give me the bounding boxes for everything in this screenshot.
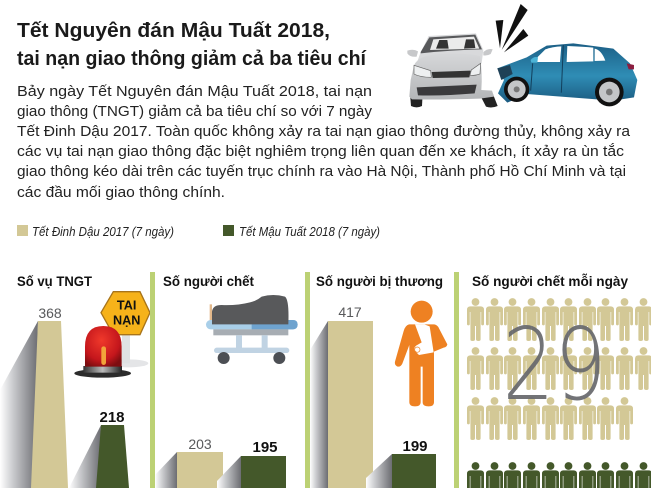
- heading: Số người chết: [163, 273, 254, 289]
- pictogram: 2018 people: [467, 462, 651, 488]
- title: Tết Nguyên đán Mậu Tuất 2018,: [17, 20, 330, 42]
- intro text block: Tết Đinh Dậu 2017. Toàn quốc không xảy ra tai nạn giao thông đường thủy, không xảy ra: [17, 123, 631, 140]
- heading: Số vụ TNGT: [17, 273, 92, 289]
- large number 29: 29: [502, 306, 606, 423]
- heading: Số người chết mỗi ngày: [472, 273, 628, 289]
- intro text block: giao thông (TNGT) giảm cả ba tiêu chí so với 7 ngày: [17, 103, 373, 120]
- icon: injured person: [395, 301, 447, 406]
- panel: so nguoi chet moi ngay: [467, 273, 651, 488]
- intro text block: các vụ tai nạn giao thông đặc biệt nghiêm trọng liên quan đến xe khách, ít xảy ra ùn tắc: [17, 143, 625, 160]
- heading: Số người bị thương: [316, 273, 443, 289]
- panel: so nguoi chet: [155, 273, 298, 488]
- icon: accident sign and siren: TAI: [117, 298, 136, 312]
- divider: [454, 272, 459, 488]
- illustration: car crash: [407, 4, 637, 108]
- icon: impact spikes: [496, 4, 528, 52]
- icon: grey car front: [407, 33, 498, 108]
- intro text block: giao thông kéo dài trên các tuyến trục chính ra vào Hà Nội, Thành phố Hồ Chí Minh và tại: [17, 163, 626, 180]
- bar 2018: 218: [69, 409, 129, 488]
- bar 2017: 417: [310, 304, 373, 488]
- bar 2018: 199: [366, 438, 436, 488]
- title: [17, 20, 367, 70]
- divider: [150, 272, 155, 488]
- intro text block: Bảy ngày Tết Nguyên đán Mậu Tuất 2018, tai nạn: [17, 83, 372, 100]
- bar 2017: 368: [0, 305, 68, 488]
- title: tai nạn giao thông giảm cả ba tiêu chí: [17, 48, 367, 70]
- intro text block: các đầu mối giao thông chính.: [17, 184, 225, 201]
- bar 2017: 203: 203: [188, 436, 212, 452]
- icon: blue car side: [497, 43, 637, 106]
- intro text block: [17, 83, 631, 201]
- bar 2018: 199: 199: [402, 438, 428, 455]
- icon: accident sign and siren: [74, 292, 150, 378]
- panel: so vu TNGT: [0, 273, 150, 488]
- icon: stretcher: [206, 295, 298, 364]
- divider: [305, 272, 310, 488]
- bar 2017: 203: [155, 436, 223, 488]
- panel: so nguoi bi thuong: [310, 273, 447, 488]
- bar 2017: 368: 368: [38, 305, 62, 321]
- legend item: 2018: Tết Mậu Tuất 2018 (7 ngày): [239, 225, 380, 239]
- bar 2018: 195: 195: [252, 439, 278, 456]
- pictogram: 2017 people: [467, 298, 651, 440]
- icon: accident sign and siren: NẠN: [113, 313, 140, 327]
- legend item: 2017: Tết Đinh Dậu 2017 (7 ngày): [32, 225, 174, 239]
- bar 2018: 195: [217, 439, 286, 488]
- bar 2017: 417: 417: [338, 304, 362, 320]
- legend: [17, 225, 380, 239]
- bar 2018: 218: 218: [99, 409, 125, 426]
